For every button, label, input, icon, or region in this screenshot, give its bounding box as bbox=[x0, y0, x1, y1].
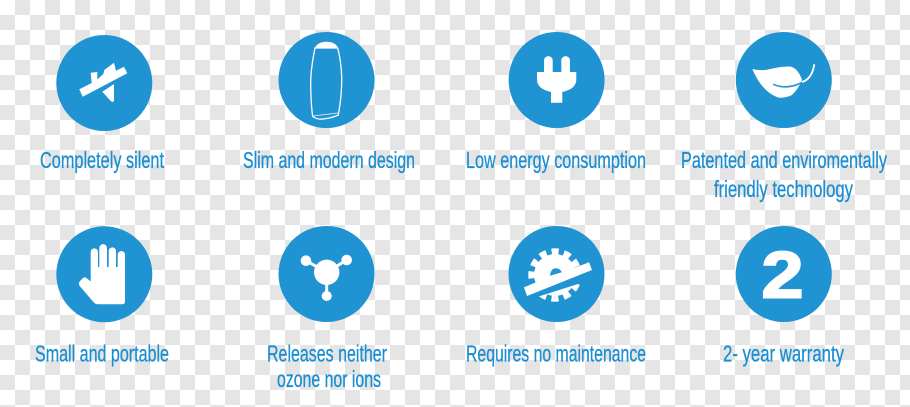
panel: completely silent bbox=[40, 35, 164, 173]
label: releases neither ozone nor ions: Releases neither bbox=[267, 340, 387, 366]
label: patented and enviromentally friendly technology: friendly technology bbox=[714, 176, 853, 202]
icon badge: leaf bbox=[736, 32, 832, 128]
icon badge: slim device bbox=[278, 32, 374, 128]
icon badge: molecule bbox=[278, 226, 374, 322]
panel: environmentally friendly technology bbox=[681, 32, 887, 202]
label: releases neither ozone nor ions: ozone nor ions bbox=[277, 366, 381, 392]
label: releases neither ozone nor ions bbox=[267, 340, 387, 392]
label: slim and modern design: Slim and modern design bbox=[243, 147, 415, 173]
label: 2-year warranty: 2- year warranty bbox=[723, 340, 844, 366]
icon badge: hand bbox=[56, 226, 152, 322]
panel: requires no maintenance bbox=[466, 226, 646, 366]
label: completely silent: Completely silent bbox=[40, 147, 164, 173]
icon badge: number 2: 2 bbox=[762, 237, 804, 311]
label: low energy consumption: Low energy consumption bbox=[466, 147, 646, 173]
icon badge: number 2 bbox=[736, 226, 832, 322]
label: patented and enviromentally friendly technology bbox=[681, 147, 887, 202]
panel: slim and modern design bbox=[243, 32, 415, 173]
panel: low energy consumption bbox=[466, 32, 646, 173]
label: small and portable: Small and portable bbox=[35, 340, 169, 366]
icon badge: silent bbox=[56, 35, 152, 131]
panel: small and portable bbox=[35, 226, 169, 366]
panel: 2-year warranty bbox=[723, 226, 844, 366]
label: requires no maintenance: Requires no maintenance bbox=[466, 340, 646, 366]
panel: releases neither ozone nor ions bbox=[267, 226, 387, 392]
icon badge: crossed gear bbox=[508, 226, 604, 322]
icon badge: plug bbox=[509, 32, 605, 128]
